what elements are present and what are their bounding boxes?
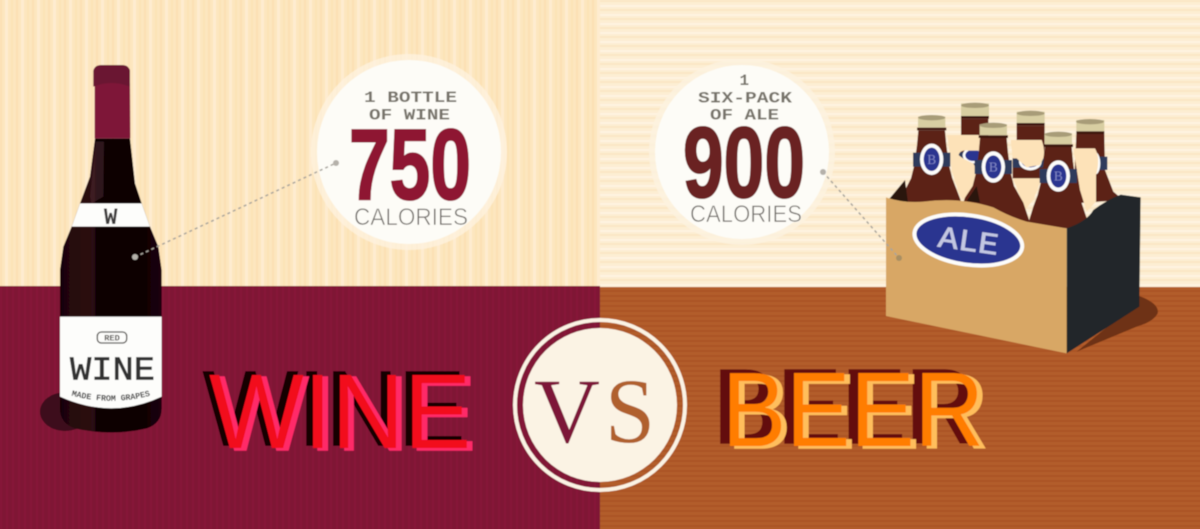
upper label	[72, 203, 150, 231]
WINE title: WINE	[203, 350, 465, 468]
VS badge	[515, 320, 685, 490]
beer serving text: OF ALE	[710, 106, 779, 124]
carton front panel	[886, 197, 1067, 353]
BEER title: BEER	[727, 353, 989, 471]
background: beer bottom panel	[600, 287, 1200, 529]
beer callout line	[820, 169, 902, 261]
wine name: WINE	[70, 352, 155, 390]
red badge	[97, 332, 127, 343]
WINE title: WINE	[209, 353, 471, 471]
VS letters: V	[534, 360, 600, 462]
beer serving text: SIX-PACK	[698, 90, 792, 108]
wine calorie circle	[311, 54, 507, 250]
ale oval label	[911, 208, 1026, 272]
front bottle right: B	[1054, 169, 1063, 184]
six-pack of ale	[886, 103, 1158, 353]
back bottle right	[1073, 119, 1123, 203]
bottle glass	[60, 138, 162, 432]
front bottle left: B	[927, 152, 936, 167]
front bottle right	[1027, 132, 1090, 228]
background: beer top panel	[600, 0, 1200, 287]
main label: RED	[104, 333, 120, 343]
bottle neck highlight	[90, 142, 104, 203]
carton tabs and gaps	[947, 135, 1098, 212]
background: wine bottom panel	[0, 286, 600, 529]
wine serving text: OF WINE	[369, 106, 450, 124]
bottle shadow	[40, 392, 90, 431]
front bottle middle	[957, 123, 1030, 223]
bottle cap	[93, 65, 130, 87]
bottle foil neck	[95, 80, 130, 138]
beer calorie circle	[649, 59, 835, 245]
beer calorie number: 900	[683, 107, 805, 219]
BEER title: BEER	[713, 348, 975, 466]
front bottle middle: B	[989, 160, 998, 175]
WINE title: WINE	[214, 355, 476, 473]
wine bottle	[40, 64, 163, 433]
ale oval label: ALE	[936, 222, 1001, 265]
beer serving text	[698, 72, 792, 124]
wine serving text	[364, 89, 457, 124]
back bottle middle	[1013, 111, 1045, 178]
main label	[59, 316, 163, 410]
upper label: W	[104, 205, 118, 231]
made from grapes: MADE FROM GRAPES	[71, 390, 150, 402]
VS badge: S	[605, 360, 655, 462]
beer calories label: CALORIES	[690, 201, 802, 228]
wine serving text: 1 BOTTLE	[364, 89, 457, 107]
wine calorie number: 750	[349, 109, 471, 221]
front bottle left	[888, 115, 962, 207]
background: wine top panel	[0, 0, 600, 286]
pack shadow	[1077, 295, 1158, 352]
back bottle left	[958, 103, 989, 170]
BEER title: BEER	[722, 351, 984, 469]
beer serving text: 1	[740, 72, 749, 90]
wine calories label: CALORIES	[354, 204, 468, 231]
wine callout line	[132, 160, 339, 260]
carton side panel	[1067, 195, 1141, 353]
